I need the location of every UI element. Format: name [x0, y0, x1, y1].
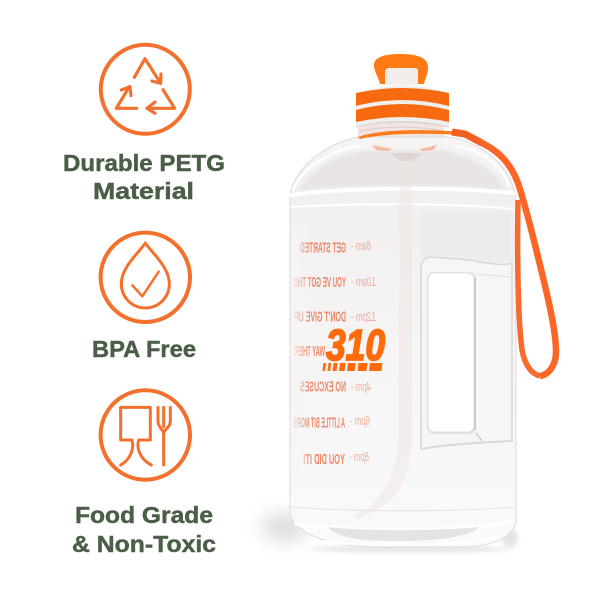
water bottle	[261, 54, 556, 552]
mirrored time markers: 12pm -	[351, 309, 376, 324]
flip-top lid	[374, 54, 428, 85]
heading: Food Grade & Non-Toxic: Food Grade	[75, 502, 213, 528]
bottle base	[327, 527, 479, 541]
mirrored time markers: 8am -	[351, 238, 371, 253]
mirrored time markers: 6pm -	[350, 413, 370, 428]
straw	[354, 157, 412, 520]
heading: Food Grade & Non-Toxic	[72, 502, 216, 557]
heading: Durable PETG Material: Durable PETG	[63, 150, 225, 176]
heading: Durable PETG Material	[63, 150, 225, 204]
water bottle: DON'T GIVE UP	[294, 308, 346, 326]
upper right panel shading	[421, 212, 512, 263]
cap collar	[358, 130, 463, 139]
strap	[452, 132, 556, 376]
water bottle: WAY THERE	[291, 343, 325, 360]
bottle shadow	[261, 513, 518, 552]
handle	[421, 257, 513, 449]
icon: water drop with check	[101, 233, 190, 322]
water bottle: YOU VE GOT THIS	[292, 274, 346, 291]
bottle body	[290, 137, 516, 547]
bottle highlights	[291, 146, 514, 545]
mirrored time markers: YOU DID IT!	[303, 451, 345, 468]
icon: recycling arrows	[101, 45, 190, 134]
mirrored time markers: 10am -	[351, 274, 376, 289]
mirrored time markers	[291, 238, 376, 468]
mirrored time markers: 8pm -	[349, 449, 369, 464]
heading: Food Grade & Non-Toxic: & Non-Toxic	[72, 531, 216, 557]
mirrored time markers: 4pm -	[351, 379, 371, 394]
logo: 310: 310	[326, 321, 385, 370]
screw cap bands	[356, 86, 449, 127]
bottle neck	[358, 120, 444, 140]
water bottle: A LITTLE BIT MORE	[293, 414, 345, 432]
dome shading	[299, 150, 505, 190]
heading: BPA Free: BPA Free	[92, 336, 196, 362]
icon: glass and fork	[101, 390, 190, 480]
cap reflection	[372, 145, 437, 161]
mirrored time markers: GET STARTED	[300, 240, 346, 256]
mirrored time markers: NO EXCUSES	[300, 378, 346, 396]
heading: Durable PETG Material: Material	[93, 178, 194, 204]
